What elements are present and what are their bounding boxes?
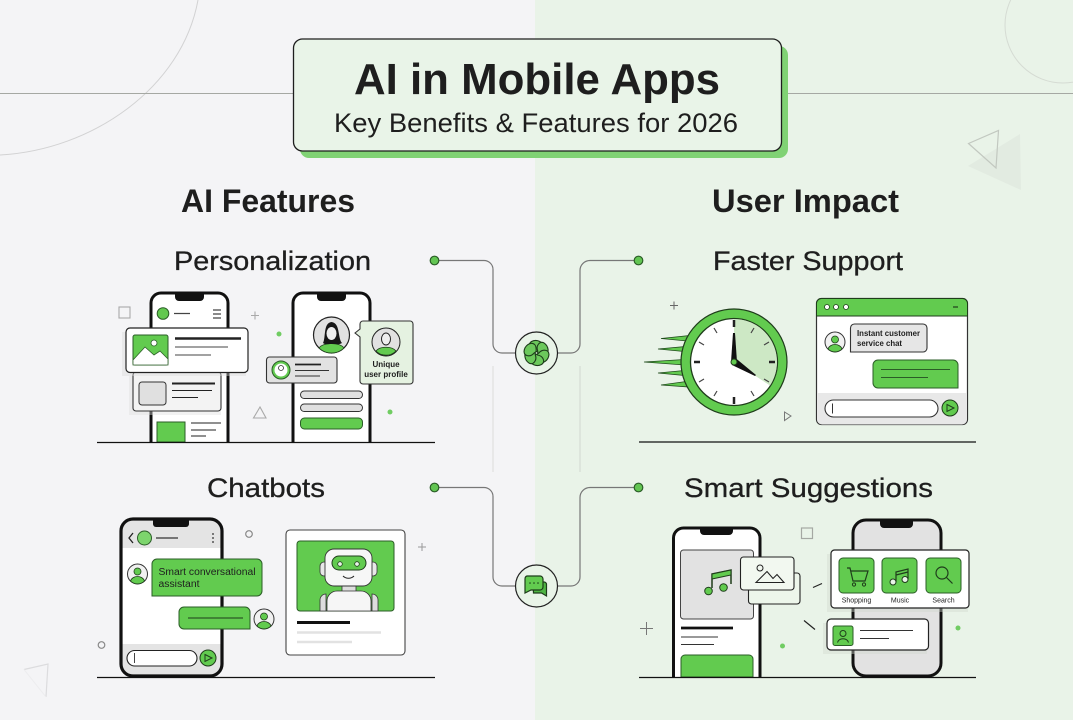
- heading: User Impact: User Impact: [712, 183, 899, 219]
- heading: AI Features: AI Features: [181, 183, 355, 219]
- panel: personalization illustration: [97, 293, 435, 442]
- suggestion profile card: [823, 619, 928, 654]
- unique user profile bubble: Unique: [372, 360, 400, 369]
- suggestion apps card: [827, 550, 969, 612]
- heading: Personalization: Personalization: [174, 246, 371, 276]
- suggestion apps card: Shopping: [842, 598, 871, 604]
- bot message bubble: [152, 559, 262, 596]
- subtitle: Key Benefits & Features for 2026: [334, 108, 738, 138]
- right phone: [293, 293, 370, 442]
- decoration: triangles top right: [968, 130, 1021, 190]
- robot card: [286, 530, 405, 655]
- decoration: faint triangle bottom left: [24, 664, 48, 697]
- connector dots: [430, 256, 643, 492]
- bot message bubble: Smart conversational: [158, 567, 256, 578]
- connector: bottom branches: [438, 488, 635, 586]
- icon: chat bubbles hub: [516, 565, 558, 607]
- speed lines: [644, 336, 690, 387]
- decoration shapes: [119, 307, 266, 418]
- bot message bubble: assistant: [158, 579, 200, 590]
- phone: [121, 519, 222, 676]
- image cards: [740, 557, 800, 604]
- chat window: [816, 298, 968, 424]
- chat window: service chat: [857, 338, 902, 348]
- user chip card: [266, 357, 337, 383]
- title: AI in Mobile Apps: [354, 55, 720, 104]
- heading: Smart Suggestions: Smart Suggestions: [684, 473, 933, 503]
- reply bubble: [179, 607, 250, 629]
- icon: music note: [705, 570, 731, 595]
- panel: faster support illustration: [639, 298, 976, 442]
- title box: [294, 39, 788, 158]
- panel: chatbots illustration: [97, 519, 435, 678]
- connector: top branches: [438, 260, 635, 353]
- clock: [681, 309, 787, 415]
- right phone: [853, 520, 941, 676]
- panel: smart suggestions illustration: [639, 520, 976, 678]
- suggestion apps card: Music: [891, 598, 910, 604]
- chat window: Instant customer: [857, 328, 921, 338]
- unique user profile bubble: user profile: [364, 370, 408, 379]
- heading: Chatbots: Chatbots: [207, 473, 325, 503]
- heading: Faster Support: Faster Support: [713, 246, 904, 276]
- left phone: [151, 293, 228, 442]
- unique user profile bubble: [355, 321, 413, 384]
- suggestion apps card: Search: [932, 598, 955, 604]
- content card 2: [129, 372, 221, 415]
- left phone: [674, 528, 760, 677]
- avatar: woman: [314, 317, 350, 353]
- content card 1: [122, 328, 248, 376]
- icon: AI swirl hub: [516, 332, 558, 374]
